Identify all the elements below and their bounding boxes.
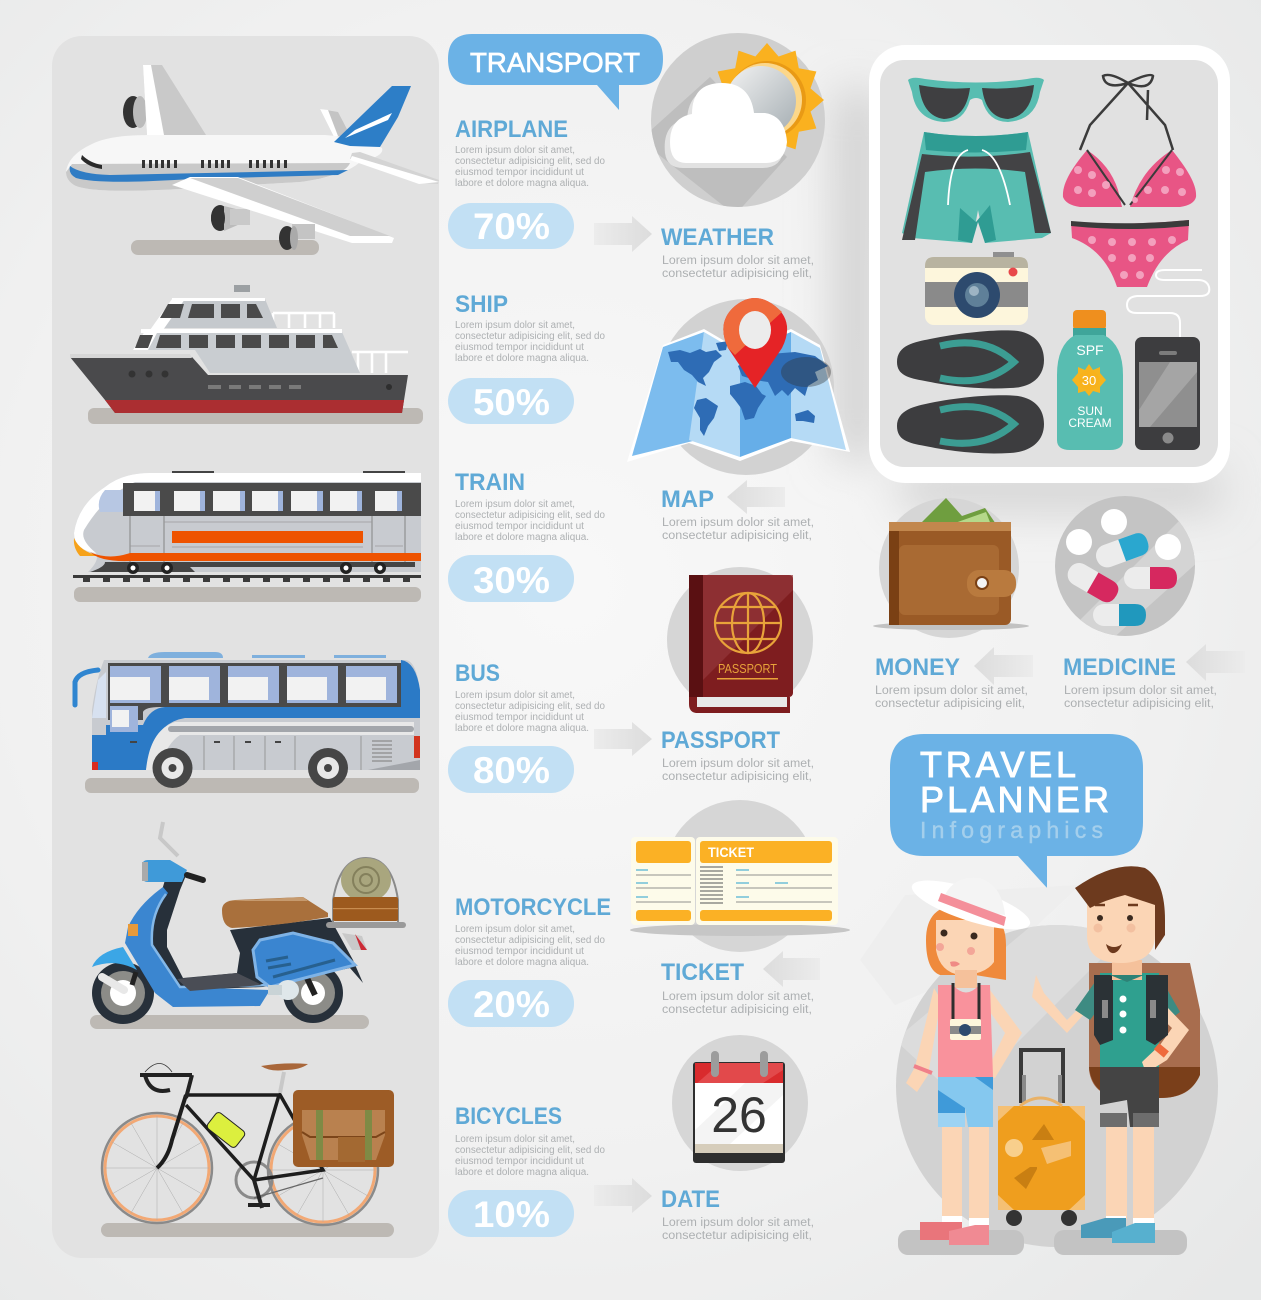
title bubble: travel planner: Infographics	[920, 817, 1103, 843]
text block: train: labore et dolore magna aliqua.	[455, 532, 589, 543]
text block: ticket: TICKET	[661, 959, 744, 986]
icon: passport: PASSPORT	[718, 662, 777, 676]
icon: passport	[667, 567, 813, 713]
icon: bicycle	[101, 1063, 394, 1237]
text block: airplane: labore et dolore magna aliqua.	[455, 178, 589, 189]
icon: ship	[70, 285, 423, 424]
text block: weather: consectetur adipisicing elit,	[662, 268, 812, 280]
illustration: travellers	[896, 866, 1218, 1255]
percentage pill: 70%	[448, 203, 574, 249]
text block: train: Lorem ipsum dolor sit amet,	[455, 499, 575, 510]
text block: train: TRAIN	[455, 469, 525, 496]
text block: train	[455, 469, 605, 543]
heading bubble: transport: TRANSPORT	[470, 47, 640, 78]
title bubble: travel planner: TRAVEL	[920, 744, 1076, 785]
icon: swim shorts	[902, 132, 1051, 243]
icon: bikini top	[1063, 75, 1196, 207]
icon: sun cream: 30	[1082, 373, 1096, 388]
text block: ship: eiusmod tempor incididunt ut	[455, 342, 584, 353]
percentage pill: 50%	[448, 378, 574, 424]
text block: bus: eiusmod tempor incididunt ut	[455, 712, 584, 723]
text block: motorcycle: Lorem ipsum dolor sit amet,	[455, 924, 575, 935]
icon: bikini bottom	[1071, 220, 1189, 287]
icon: motorcycle	[90, 822, 406, 1029]
text block: bus	[455, 660, 605, 734]
icon: bus	[75, 652, 420, 793]
text block: bicycles: consectetur adipisicing elit, sed do	[455, 1145, 605, 1156]
text block: ship: SHIP	[455, 291, 508, 318]
man	[1032, 866, 1200, 1243]
text block: bus: consectetur adipisicing elit, sed do	[455, 701, 605, 712]
text block: medicine: MEDICINE	[1063, 654, 1176, 681]
percentage pill: 30%	[448, 555, 574, 602]
icon: sunglasses	[908, 78, 1044, 122]
text block: map: MAP	[661, 486, 714, 513]
text block: money: Lorem ipsum dolor sit amet,	[875, 685, 1028, 697]
panel: packing items	[869, 45, 1230, 483]
text block: medicine	[1063, 654, 1217, 710]
text block: ticket	[661, 959, 814, 1016]
text block: weather: WEATHER	[661, 224, 774, 251]
arrow: to medicine	[1186, 644, 1245, 681]
text block: medicine: consectetur adipisicing elit,	[1064, 698, 1214, 710]
icon: map with pin	[627, 298, 850, 475]
arrow: to date	[594, 1178, 652, 1213]
text block: bicycles: labore et dolore magna aliqua.	[455, 1167, 589, 1178]
percentage pill: 10%: 10%	[473, 1194, 550, 1235]
title bubble: travel planner: PLANNER	[920, 779, 1109, 820]
text block: motorcycle: labore et dolore magna aliqua.	[455, 957, 589, 968]
text block: ship	[455, 291, 605, 364]
arrow: to weather	[594, 216, 652, 252]
text block: passport: PASSPORT	[661, 727, 780, 754]
text block: motorcycle	[455, 894, 611, 968]
text block: passport	[661, 727, 814, 783]
arrow: to money	[974, 647, 1033, 685]
text block: date: DATE	[661, 1186, 720, 1213]
percentage pill: 70%: 70%	[473, 206, 550, 247]
text block: money: consectetur adipisicing elit,	[875, 698, 1025, 710]
icon: calendar date: 26	[711, 1087, 767, 1143]
text block: money	[875, 654, 1028, 710]
text block: map: Lorem ipsum dolor sit amet,	[662, 517, 814, 529]
percentage pill: 20%	[448, 980, 574, 1027]
text block: ship: Lorem ipsum dolor sit amet,	[455, 320, 575, 331]
text block: airplane	[455, 116, 605, 189]
text block: passport: consectetur adipisicing elit,	[662, 771, 812, 783]
text block: weather	[661, 224, 814, 280]
text block: motorcycle: consectetur adipisicing elit, sed do	[455, 935, 605, 946]
icon: sun cream: SPF	[1076, 342, 1104, 358]
text block: airplane: consectetur adipisicing elit, sed do	[455, 156, 605, 167]
icon: sun cream	[1057, 310, 1123, 450]
icon: ticket: TICKET	[708, 844, 754, 860]
icon: wallet	[873, 498, 1029, 638]
text block: airplane: eiusmod tempor incididunt ut	[455, 167, 584, 178]
icon: weather	[651, 33, 825, 207]
icon: sun cream: CREAM	[1068, 416, 1112, 430]
text block: map	[661, 486, 814, 542]
icon: flip flops	[897, 330, 1044, 453]
woman	[906, 871, 1035, 1245]
text block: date: Lorem ipsum dolor sit amet,	[662, 1217, 814, 1229]
text block: ticket: consectetur adipisicing elit,	[662, 1004, 812, 1016]
title bubble: travel planner	[890, 734, 1143, 888]
text block: date	[661, 1186, 814, 1242]
text block: train: eiusmod tempor incididunt ut	[455, 521, 584, 532]
icon: train	[73, 471, 421, 602]
arrow: to map	[727, 480, 785, 514]
icon: sun cream: SUN	[1077, 404, 1103, 418]
suitcase	[998, 1050, 1085, 1226]
text block: bicycles: BICYCLES	[455, 1103, 562, 1130]
icon: smartphone	[1127, 270, 1209, 450]
text block: money: MONEY	[875, 654, 960, 681]
percentage pill: 80%: 80%	[473, 750, 550, 791]
percentage pill: 10%	[448, 1190, 574, 1237]
text block: airplane: AIRPLANE	[455, 116, 568, 143]
text block: bicycles	[455, 1103, 605, 1178]
icon: calendar date	[672, 1035, 808, 1171]
icon: airplane	[66, 65, 439, 255]
text block: airplane: Lorem ipsum dolor sit amet,	[455, 145, 575, 156]
arrow: to passport	[594, 722, 652, 756]
text block: bus: BUS	[455, 660, 500, 687]
panel: transport vehicles	[52, 36, 439, 1258]
text block: bus: Lorem ipsum dolor sit amet,	[455, 690, 575, 701]
percentage pill: 50%: 50%	[473, 382, 550, 423]
text block: map: consectetur adipisicing elit,	[662, 530, 812, 542]
text block: bicycles: Lorem ipsum dolor sit amet,	[455, 1134, 575, 1145]
text block: train: consectetur adipisicing elit, sed do	[455, 510, 605, 521]
text block: ship: labore et dolore magna aliqua.	[455, 353, 589, 364]
icon: camera	[925, 252, 1028, 325]
percentage pill: 30%: 30%	[473, 560, 550, 601]
text block: bicycles: eiusmod tempor incididunt ut	[455, 1156, 584, 1167]
text block: medicine: Lorem ipsum dolor sit amet,	[1064, 685, 1217, 697]
text block: motorcycle: eiusmod tempor incididunt ut	[455, 946, 584, 957]
percentage pill: 80%	[448, 746, 574, 793]
text block: ticket: Lorem ipsum dolor sit amet,	[662, 991, 814, 1003]
arrow: to ticket	[763, 951, 820, 987]
text block: weather: Lorem ipsum dolor sit amet,	[662, 255, 814, 267]
heading bubble: transport	[448, 34, 663, 110]
icon: medicine	[1055, 496, 1195, 636]
text block: passport: Lorem ipsum dolor sit amet,	[662, 758, 814, 770]
soft shadow around packing panel	[835, 90, 1220, 510]
text block: date: consectetur adipisicing elit,	[662, 1230, 812, 1242]
text block: bus: labore et dolore magna aliqua.	[455, 723, 589, 734]
percentage pill: 20%: 20%	[473, 984, 550, 1025]
text block: ship: consectetur adipisicing elit, sed do	[455, 331, 605, 342]
text block: motorcycle: MOTORCYCLE	[455, 894, 611, 921]
icon: ticket	[630, 800, 850, 952]
